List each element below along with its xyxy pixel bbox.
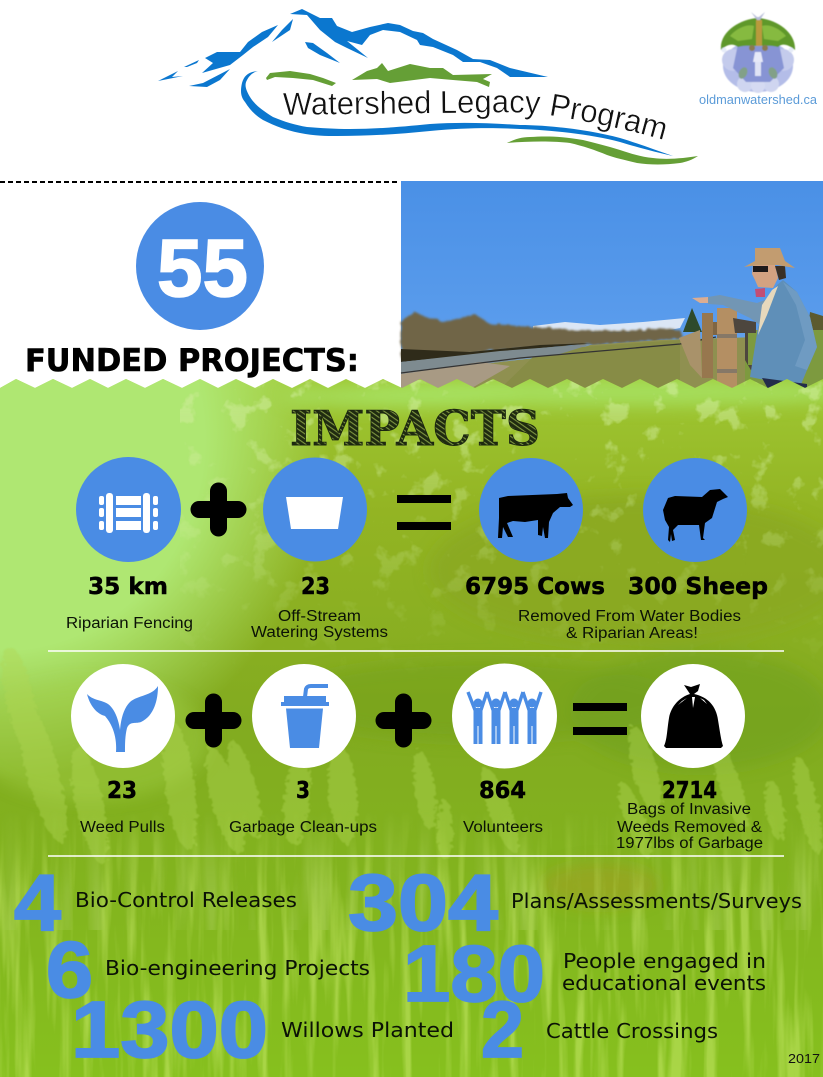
mountain range [158,9,548,87]
icon: cow [479,458,583,562]
row 1: off-stream watering [251,458,388,641]
stat: 35 km: 35 km [88,574,168,600]
stat: bio-control releases [14,858,297,947]
icon: sheep [643,458,747,562]
stat: people engaged: 180 [403,929,545,1018]
green hills [266,63,492,87]
label: riparian fencing: Riparian Fencing [66,615,193,632]
stat: willows planted [71,985,454,1074]
man in denim jacket [692,248,817,389]
label: bags of invasive weeds: Bags of Invasive [627,801,751,818]
panel: green meadow background [0,370,823,1077]
stat: 864: 864 [479,778,526,804]
heading: impacts: IMPACTS [290,401,540,457]
label: weed pulls: Weed Pulls [80,819,165,836]
stat: willows planted: 1300 [71,985,268,1074]
label: off-stream watering systems: Off-Stream [278,608,361,625]
evergreen tree [683,308,702,332]
stat: 23: 23 [107,778,137,804]
stat: people engaged: educational events [562,971,766,995]
label: removed from water bodies: & Riparian Areas! [566,625,698,642]
year label: 2017 [788,1051,820,1066]
stat: 3: 3 [296,778,310,804]
label: bags of invasive weeds: Weeds Removed & [617,819,763,836]
stat: cattle crossings: Cattle Crossings [546,1019,718,1043]
fence posts [702,313,713,378]
photo: man pointing at riparian fence [401,181,823,389]
stat: people engaged: People engaged in [563,949,766,973]
stat: willows planted: Willows Planted [281,1018,454,1042]
stat: bio-engineering projects: 6 [46,925,93,1014]
website link: oldmanwatershed.ca [699,92,818,107]
stat: plans assessments surveys: 304 [348,858,499,947]
label: garbage clean-ups: Garbage Clean-ups [229,819,377,836]
label: removed from water bodies: Removed From Water Bodies [518,608,741,625]
tree line [401,312,684,360]
plus sign [384,702,423,739]
stat: 6795 cows: 6795 Cows [465,574,605,600]
equals sign [397,495,451,530]
icon: volunteers [452,664,557,768]
row 2: weed pulls [71,664,175,836]
stat: 23: 23 [301,574,330,600]
badge: 55 [136,202,264,330]
row 2: garbage clean-ups [229,664,377,836]
stat: cattle crossings: 2 [481,985,524,1074]
river [401,344,592,374]
row 1: cows [465,458,605,600]
row 2: volunteers [452,664,557,836]
icon: garbage bag [641,664,745,768]
person behind [733,318,756,372]
icon: water trough [263,458,367,562]
heading: funded projects: FUNDED PROJECTS: [25,343,359,379]
meadow [401,335,823,389]
icon: leaves [71,664,175,768]
gravel bar [401,362,510,389]
far right trees [808,312,823,330]
stat: plans assessments surveys: Plans/Assessments/Surveys [511,889,802,913]
barbed wire [401,337,716,373]
stat: bio-engineering projects: Bio-engineering Projects [105,956,370,980]
stat: cattle crossings [481,985,718,1074]
plus sign [199,491,238,528]
stat: bio-control releases: 4 [14,858,62,947]
fence planks [679,330,702,378]
stat: plans assessments surveys [348,858,802,947]
plus sign [194,702,233,739]
distant mountains [533,318,685,332]
logo: Oldman Watershed Council emblem [721,12,795,93]
label: volunteers: Volunteers [463,819,543,836]
icon: fence [76,457,181,562]
logo: Watershed Legacy Program [158,9,698,164]
row 1: riparian fencing [66,457,193,632]
stat: people engaged [403,929,766,1018]
green swoosh [507,136,698,164]
icon: cup [252,664,356,768]
badge: 55: 55 [157,223,248,314]
stat: 2714: 2714 [662,778,717,804]
stat: bio-control releases: Bio-Control Releases [75,888,297,912]
stat: bio-engineering projects [46,925,370,1014]
row 1: sheep [628,458,768,600]
stat: 300 sheep: 300 Sheep [628,574,768,600]
row 2: garbage bags [616,664,763,852]
logo wordmark: Watershed Legacy Program [282,90,666,140]
river swoosh [241,71,673,156]
label: bags of invasive weeds: 1977lbs of Garbage [616,835,763,852]
label: off-stream watering systems: Watering Systems [251,624,388,641]
river bank [401,343,592,362]
equals sign [573,703,627,735]
